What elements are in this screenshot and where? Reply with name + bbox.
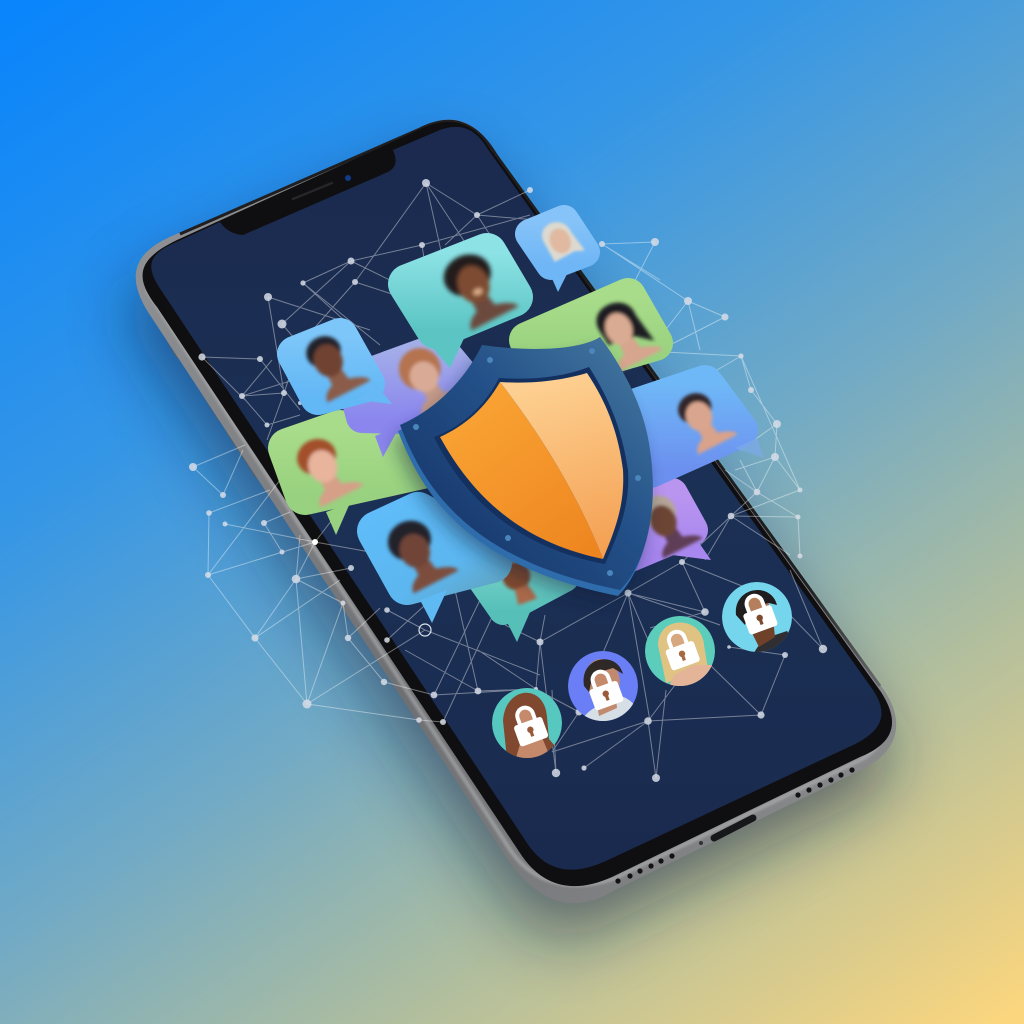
phone screen	[151, 127, 881, 870]
locked avatar: woman with brown hair	[492, 688, 562, 765]
portrait: small blue bubble	[538, 215, 585, 264]
portrait: teal top bubble	[437, 243, 520, 333]
network node dots	[189, 179, 827, 782]
speech bubble: small blue top	[530, 215, 585, 292]
dark top edge of the rim	[180, 121, 496, 234]
smartphone	[136, 120, 896, 903]
speech bubble: teal bottom	[480, 558, 570, 642]
glint on phone edge	[312, 539, 318, 545]
portrait: purple upper bubble	[393, 337, 467, 419]
shield side edge	[398, 343, 651, 596]
portrait: blue lower left bubble	[382, 510, 460, 596]
locked avatar: man with dark hair	[568, 651, 639, 726]
rim highlight on left and bottom edges	[147, 290, 884, 885]
portrait: green left bubble	[292, 428, 365, 509]
locked avatar: man with beard	[722, 582, 792, 652]
shield rivets	[413, 348, 641, 576]
phone metal rim	[136, 120, 896, 903]
charging port	[714, 818, 753, 838]
microphone hole	[699, 841, 703, 845]
portrait: blue upper left bubble	[301, 325, 372, 403]
shield frame	[400, 337, 653, 590]
speech bubble: blue right	[625, 383, 764, 470]
padlock icon	[514, 706, 548, 746]
locked avatar: blonde woman	[645, 616, 715, 691]
black bezel and notch	[143, 122, 892, 886]
padlock icon	[743, 594, 778, 634]
shield orange right half	[500, 373, 623, 559]
earpiece speaker	[293, 183, 332, 199]
speech bubble: purple upper	[352, 337, 500, 457]
speaker grille dots	[615, 767, 855, 884]
shield shadow	[394, 351, 647, 604]
portrait: purple bubble	[639, 485, 704, 559]
dark right edge of the rim	[496, 155, 880, 686]
speech bubble: blue lower left	[377, 510, 492, 623]
padlock icon	[666, 630, 700, 670]
shield inner dark border	[434, 367, 628, 564]
padlock icon	[589, 670, 624, 710]
side buttons	[168, 336, 259, 475]
speech bubble: purple lower right	[600, 485, 711, 560]
front camera	[345, 175, 351, 181]
portrait: teal bottom bubble	[498, 558, 539, 607]
speech bubble: green left	[288, 428, 440, 535]
phone drop shadow	[130, 154, 890, 937]
speech bubble: green right	[527, 292, 664, 373]
portrait: green right bubble	[591, 292, 664, 373]
open ring node	[419, 624, 431, 636]
portrait: blue bubble	[673, 383, 739, 456]
network of connected nodes	[189, 179, 827, 782]
security shield	[394, 337, 653, 604]
speech bubble: teal top	[408, 243, 520, 368]
speech bubble: blue upper left	[295, 325, 392, 404]
shield orange left half	[440, 382, 603, 559]
